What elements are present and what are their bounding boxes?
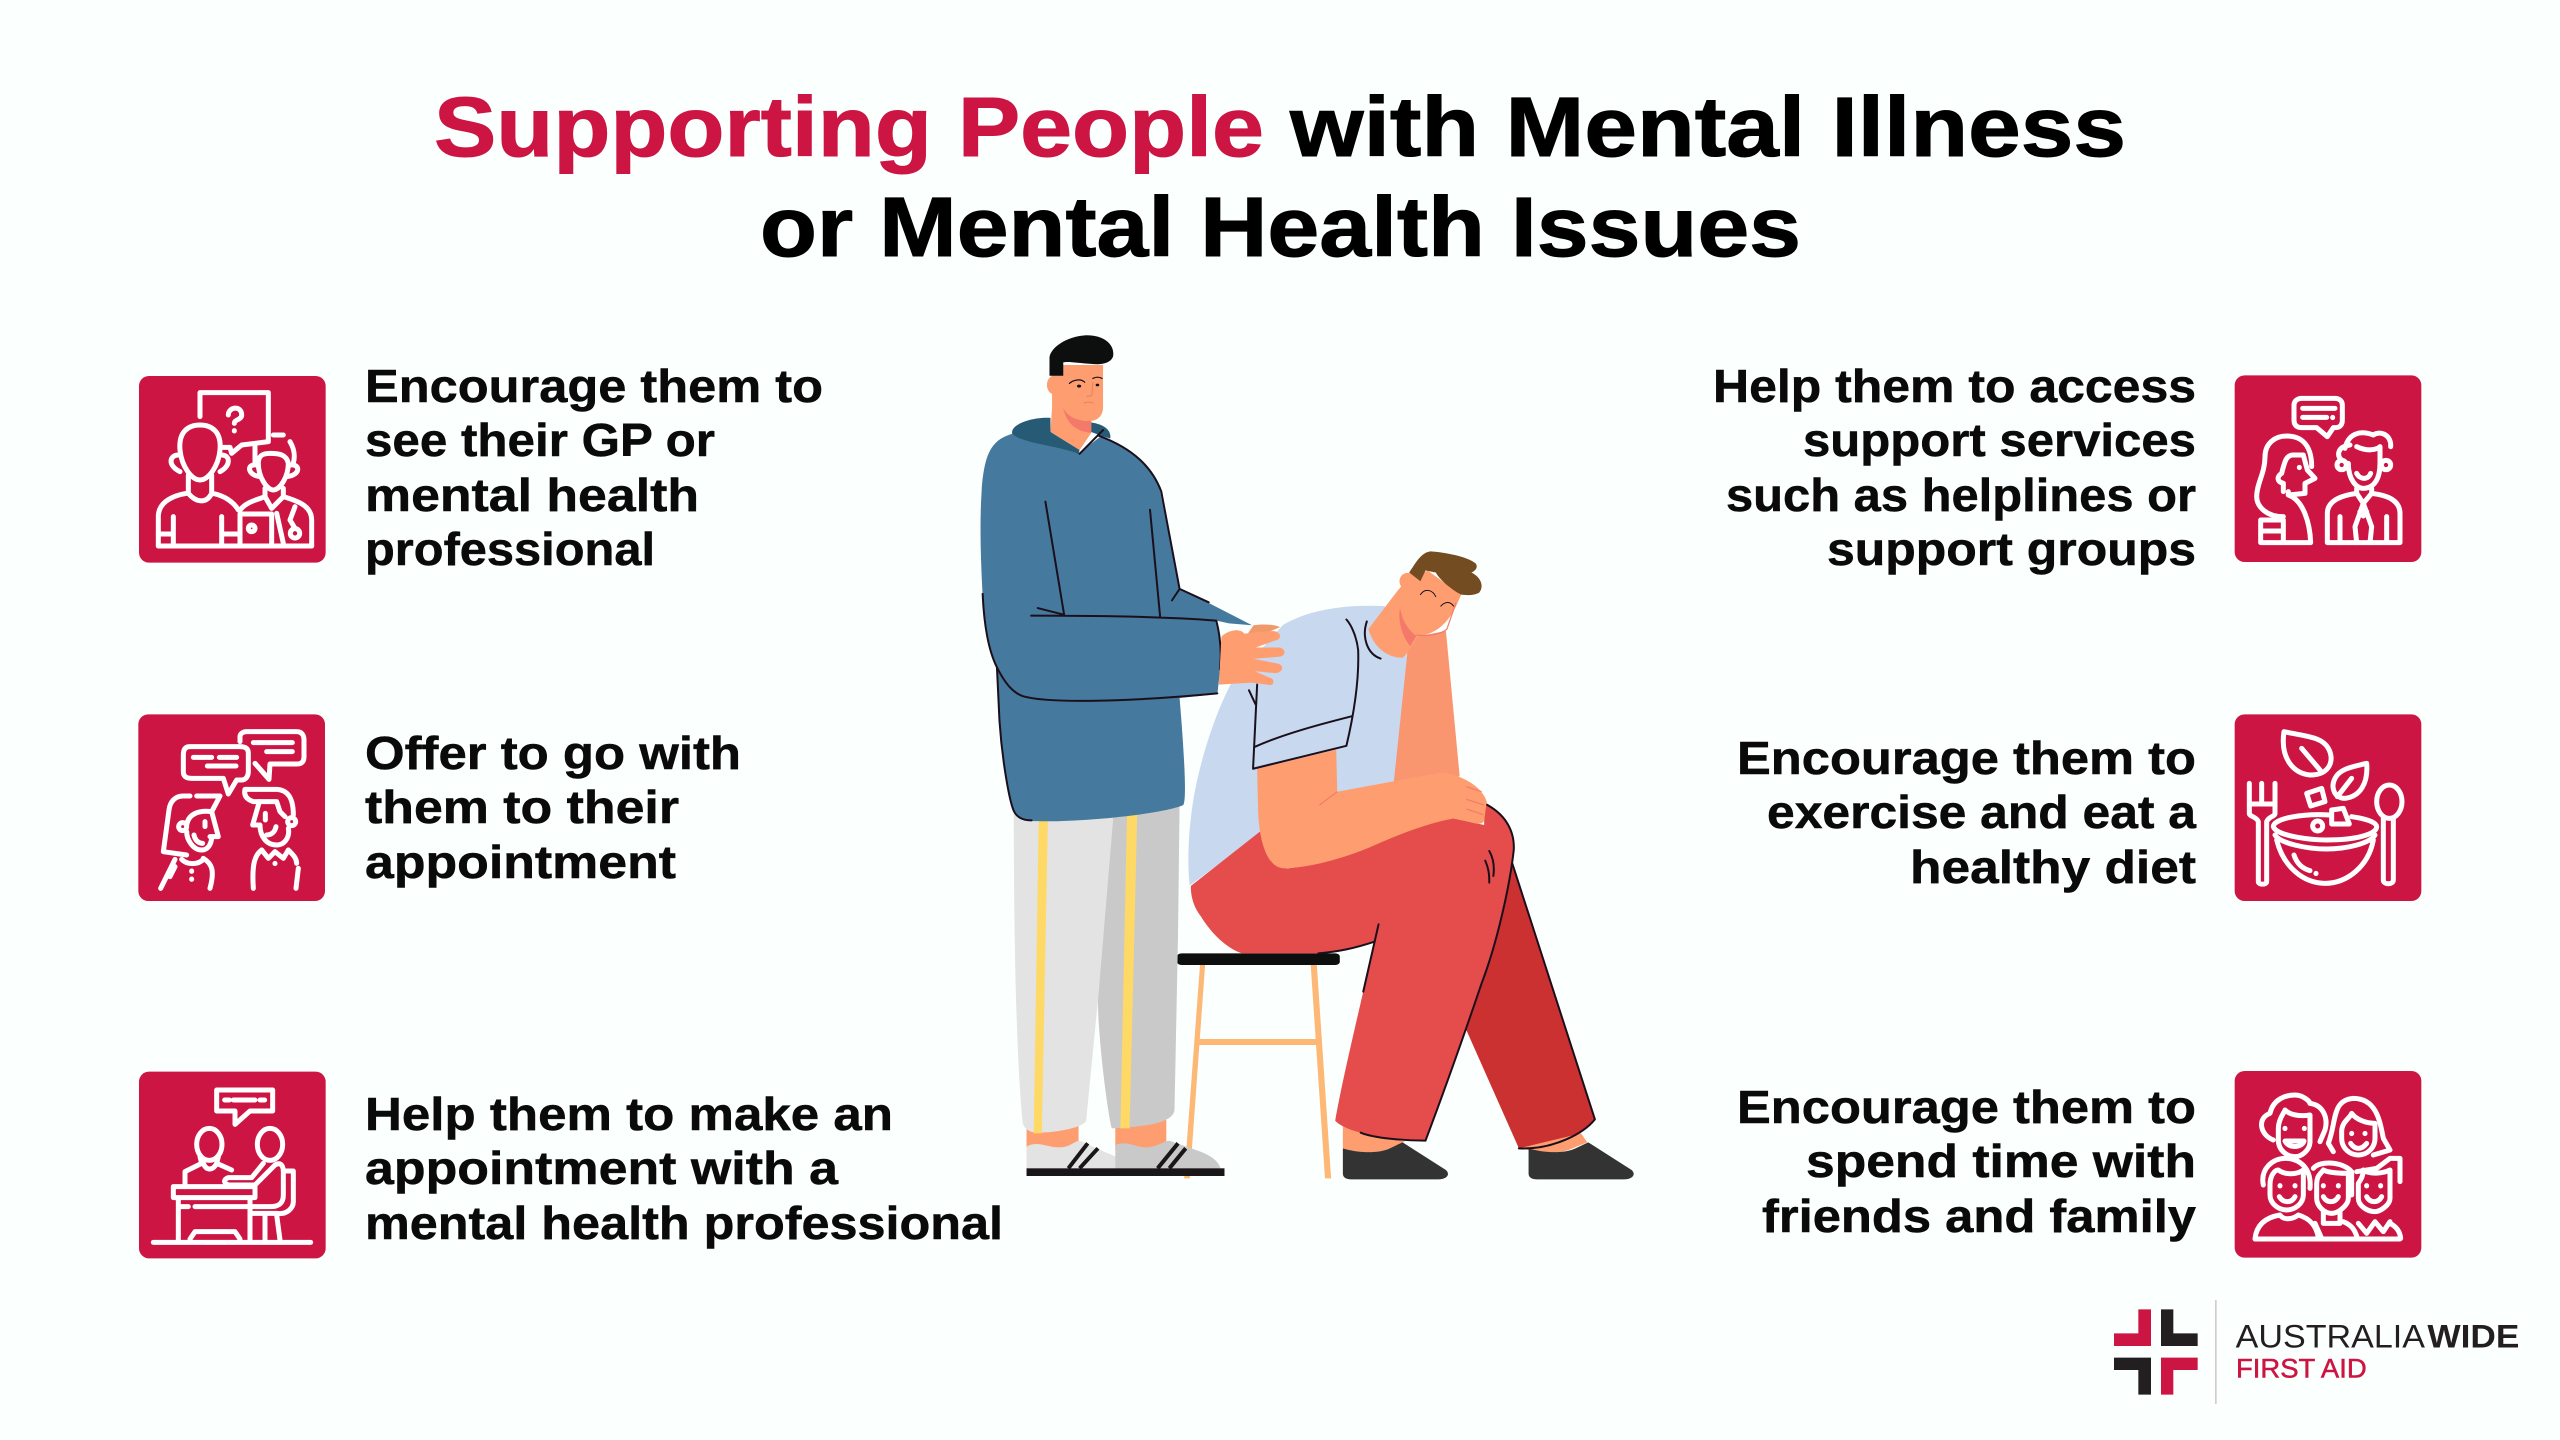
text: go with them <box>365 727 741 888</box>
text: go with them: Offer to go with <box>365 727 741 779</box>
logo wordmark <box>2236 1318 2519 1383</box>
illustration: man comforting seated man <box>981 335 1634 1179</box>
text: go with them: them to their <box>365 781 679 833</box>
text: friends and family <box>1737 1081 2196 1242</box>
logo: Australia Wide First Aid <box>2114 1300 2519 1404</box>
text: see GP: see their GP or <box>365 414 715 466</box>
panel: go with them <box>138 714 741 901</box>
text: support services: support groups <box>1827 523 2196 575</box>
text: make an appointment: appointment with a <box>365 1142 838 1194</box>
panel: make an appointment <box>139 1072 1003 1258</box>
text: see GP: Encourage them to <box>365 360 823 412</box>
text: friends and family: friends and family <box>1762 1190 2196 1242</box>
title: with Mental Illness <box>1289 80 2126 174</box>
supporting hand <box>1219 624 1285 685</box>
text: go with them: appointment <box>365 836 676 888</box>
seated man <box>1188 551 1634 1179</box>
text: exercise and diet: Encourage them to <box>1737 732 2196 784</box>
text: see GP <box>365 360 823 575</box>
icon: consultation at desk <box>139 1072 326 1258</box>
title <box>434 80 2126 274</box>
text: friends and family: spend time with <box>1806 1135 2196 1187</box>
text: see GP: professional <box>365 523 655 575</box>
logo wordmark: FIRST AID <box>2236 1353 2367 1383</box>
logo mark: cross <box>2114 1300 2217 1404</box>
text: support services: such as helplines or <box>1726 469 2196 521</box>
stool <box>1177 953 1340 1178</box>
text: support services: Help them to access <box>1713 360 2196 412</box>
icon: woman and man in conversation <box>2235 375 2421 562</box>
text: friends and family: Encourage them to <box>1737 1081 2196 1133</box>
text: exercise and diet: exercise and eat a <box>1767 786 2196 838</box>
text: exercise and diet: healthy diet <box>1910 841 2196 893</box>
icon: patient and doctor <box>139 376 326 563</box>
text: exercise and diet <box>1737 732 2196 893</box>
panel: support services <box>1713 360 2421 575</box>
text: make an appointment: mental health professional <box>365 1197 1003 1249</box>
icon: salad bowl with cutlery <box>2235 714 2421 901</box>
text: support services: support services <box>1803 414 2196 466</box>
text: make an appointment <box>365 1088 1003 1249</box>
logo wordmark: WIDE <box>2427 1318 2519 1354</box>
panel: see GP <box>139 360 823 575</box>
logo wordmark: AUSTRALIA <box>2236 1318 2426 1354</box>
text: see GP: mental health <box>365 469 699 521</box>
text: support services <box>1713 360 2196 575</box>
panel: exercise and diet <box>1737 714 2421 901</box>
icon: two people talking <box>138 714 325 901</box>
panel: friends and family <box>1737 1071 2421 1258</box>
title: Supporting People <box>434 80 1264 174</box>
standing man <box>981 335 1252 1176</box>
icon: group of five people <box>2235 1071 2421 1258</box>
text: make an appointment: Help them to make an <box>365 1088 893 1140</box>
title: or Mental Health Issues <box>760 180 1801 274</box>
